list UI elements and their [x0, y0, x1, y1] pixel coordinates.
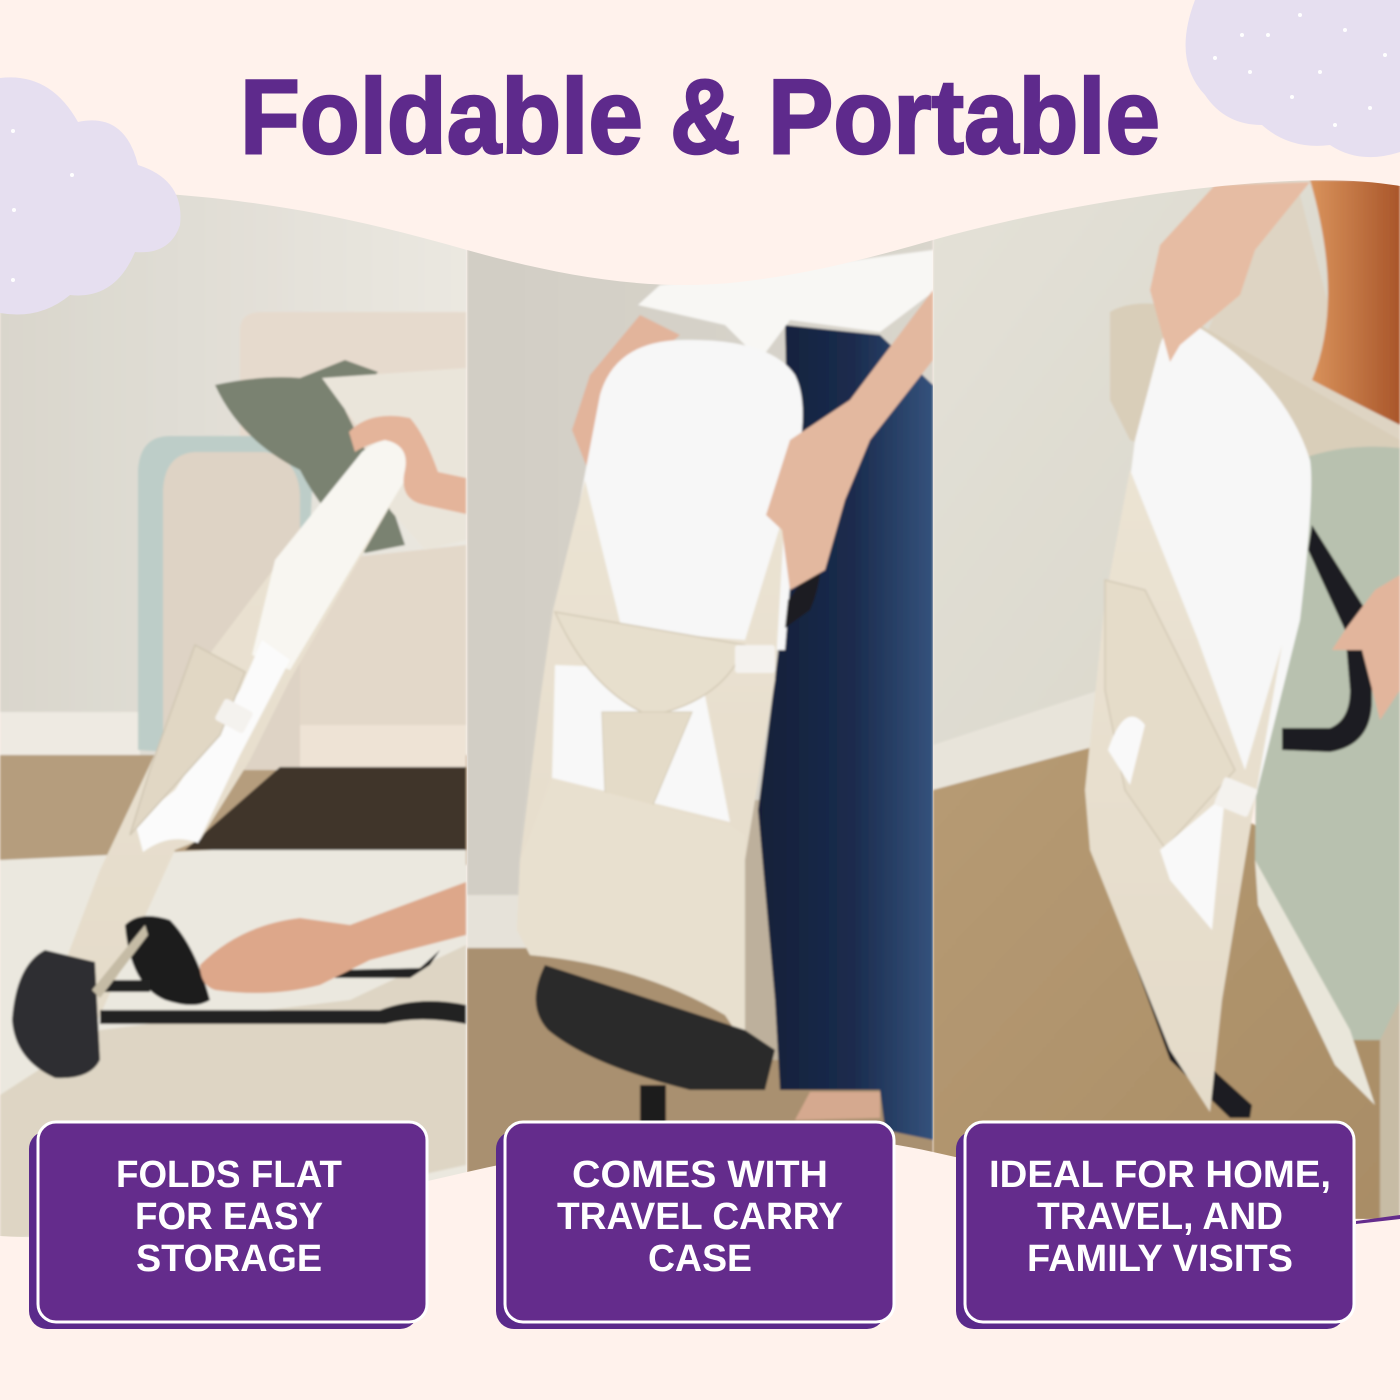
callout: folds flat: FOR EASY — [135, 1196, 323, 1238]
callout: folds flat: STORAGE — [136, 1238, 322, 1280]
carrier fabric — [520, 482, 784, 857]
right arm and hand — [766, 290, 933, 590]
white shirt — [638, 250, 933, 360]
top hand — [1150, 182, 1310, 362]
carrier mesh — [560, 340, 803, 650]
bouncer seat side view — [68, 440, 406, 1018]
hand on seat top — [349, 416, 466, 514]
callout: home and travel: IDEAL FOR HOME, — [989, 1154, 1331, 1196]
callout: home and travel: TRAVEL, AND — [1037, 1196, 1283, 1238]
right hand — [1332, 575, 1400, 720]
callout: folds flat — [29, 1122, 427, 1329]
left arm — [572, 315, 680, 475]
cloud: right — [1186, 0, 1400, 157]
callout: carry case: CASE — [648, 1238, 752, 1280]
title: Foldable & Portable — [240, 58, 1160, 176]
black base — [536, 965, 775, 1090]
callout: folds flat: FOLDS FLAT — [116, 1154, 342, 1196]
cloud: left — [0, 77, 180, 315]
carrier mesh — [1125, 322, 1311, 800]
jeans — [758, 325, 933, 1140]
carrier fabric — [1085, 470, 1282, 1112]
callout: home and travel: FAMILY VISITS — [1027, 1238, 1293, 1280]
callout: carry case: TRAVEL CARRY — [557, 1196, 843, 1238]
photo 2: person holding folded bouncer — [467, 240, 933, 1172]
photo 1: bouncer folding flat in a living room — [0, 150, 467, 1250]
callout: carry case — [496, 1122, 894, 1329]
black frame — [1282, 525, 1372, 752]
callout: carry case: COMES WITH — [572, 1154, 828, 1196]
photo strip — [0, 150, 1400, 1250]
hand on base — [200, 882, 466, 993]
hair — [1310, 180, 1400, 425]
callout: home and travel — [956, 1122, 1354, 1329]
photo 3: person lifting folded bouncer beside sofa — [933, 150, 1400, 1250]
purple edge line at right — [1356, 1215, 1400, 1224]
black base and frame — [12, 916, 466, 1078]
